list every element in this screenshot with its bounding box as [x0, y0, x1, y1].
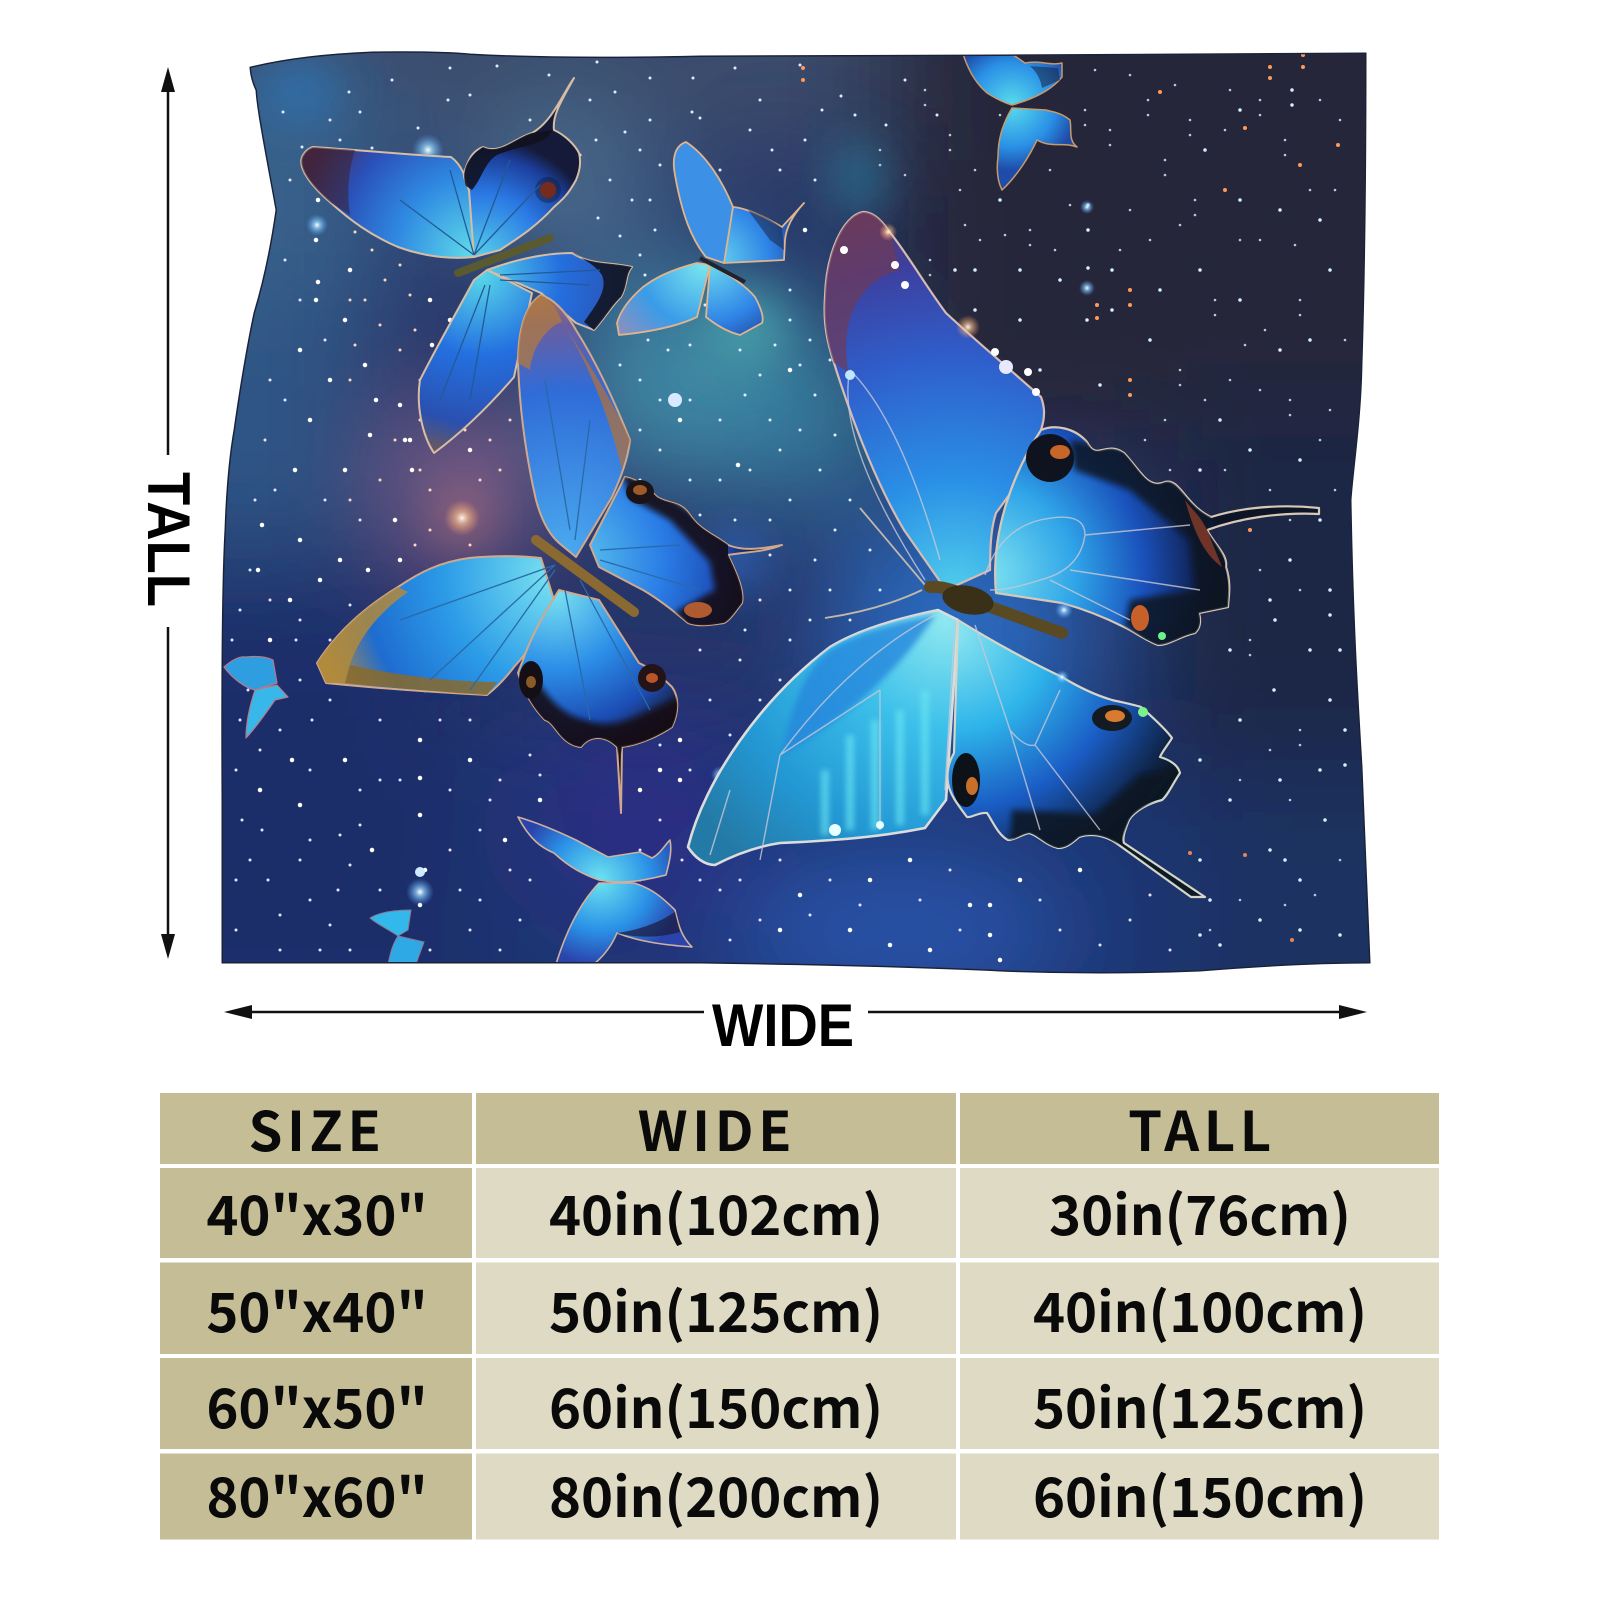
- butterfly: centre left: [317, 295, 782, 813]
- butterfly: bottom centre: [518, 817, 692, 964]
- bright glows: [306, 134, 1095, 906]
- table row 80x60: [160, 1454, 1439, 1540]
- label: wide: WIDE: [712, 992, 854, 1059]
- table row 40x30: 30in(76cm): [1049, 1172, 1351, 1251]
- table row 80x60: 80in(200cm): [549, 1454, 883, 1533]
- table row 80x60: 80"x60": [206, 1454, 428, 1533]
- galaxy background: [222, 52, 1369, 972]
- arrow: wide dimension: [224, 1005, 1367, 1019]
- butterfly: top right: [963, 54, 1077, 190]
- table row 50x40: 50in(125cm): [549, 1269, 883, 1348]
- table row 60x50: 60in(150cm): [549, 1365, 883, 1444]
- left lower wing: [688, 610, 958, 865]
- butterfly: upper centre: [617, 142, 804, 335]
- upper wing: [825, 212, 1044, 590]
- arrow: tall dimension: [161, 67, 175, 959]
- table row 60x50: [160, 1358, 1439, 1449]
- body: [930, 587, 1062, 633]
- butterfly: top left: [301, 78, 632, 453]
- butterfly: left edge small: [224, 656, 288, 738]
- right hindwing: [995, 427, 1319, 645]
- table row 50x40: 40in(100cm): [1033, 1269, 1367, 1348]
- stars: [232, 55, 1345, 960]
- butterfly: bottom left small: [370, 910, 424, 964]
- table header row: [160, 1088, 1439, 1167]
- cells and veins: [710, 370, 1200, 860]
- table row 80x60: 60in(150cm): [1033, 1454, 1367, 1533]
- table row 60x50: 50in(125cm): [1033, 1365, 1367, 1444]
- table row 40x30: [160, 1168, 1439, 1258]
- label: tall: TALL: [135, 472, 202, 607]
- table row 40x30: 40in(102cm): [549, 1172, 883, 1251]
- lower wings: [317, 556, 677, 813]
- blanket: [221, 51, 1371, 974]
- table row 60x50: 60"x50": [206, 1365, 428, 1444]
- butterfly: large right: [688, 212, 1319, 897]
- right lower wing: [947, 620, 1205, 897]
- upper wings: [518, 295, 782, 625]
- table row 40x30: 40"x30": [206, 1172, 428, 1251]
- upper wings: [301, 78, 580, 258]
- table header row: WIDE: [638, 1088, 796, 1167]
- table row 50x40: [160, 1262, 1439, 1354]
- table row 50x40: 50"x40": [206, 1269, 428, 1348]
- table header row: TALL: [1128, 1088, 1276, 1167]
- table header row: SIZE: [248, 1088, 386, 1167]
- size table: [160, 1088, 1439, 1540]
- antennae: [825, 508, 925, 618]
- sparkles: [880, 224, 896, 240]
- lower wings: [419, 253, 632, 453]
